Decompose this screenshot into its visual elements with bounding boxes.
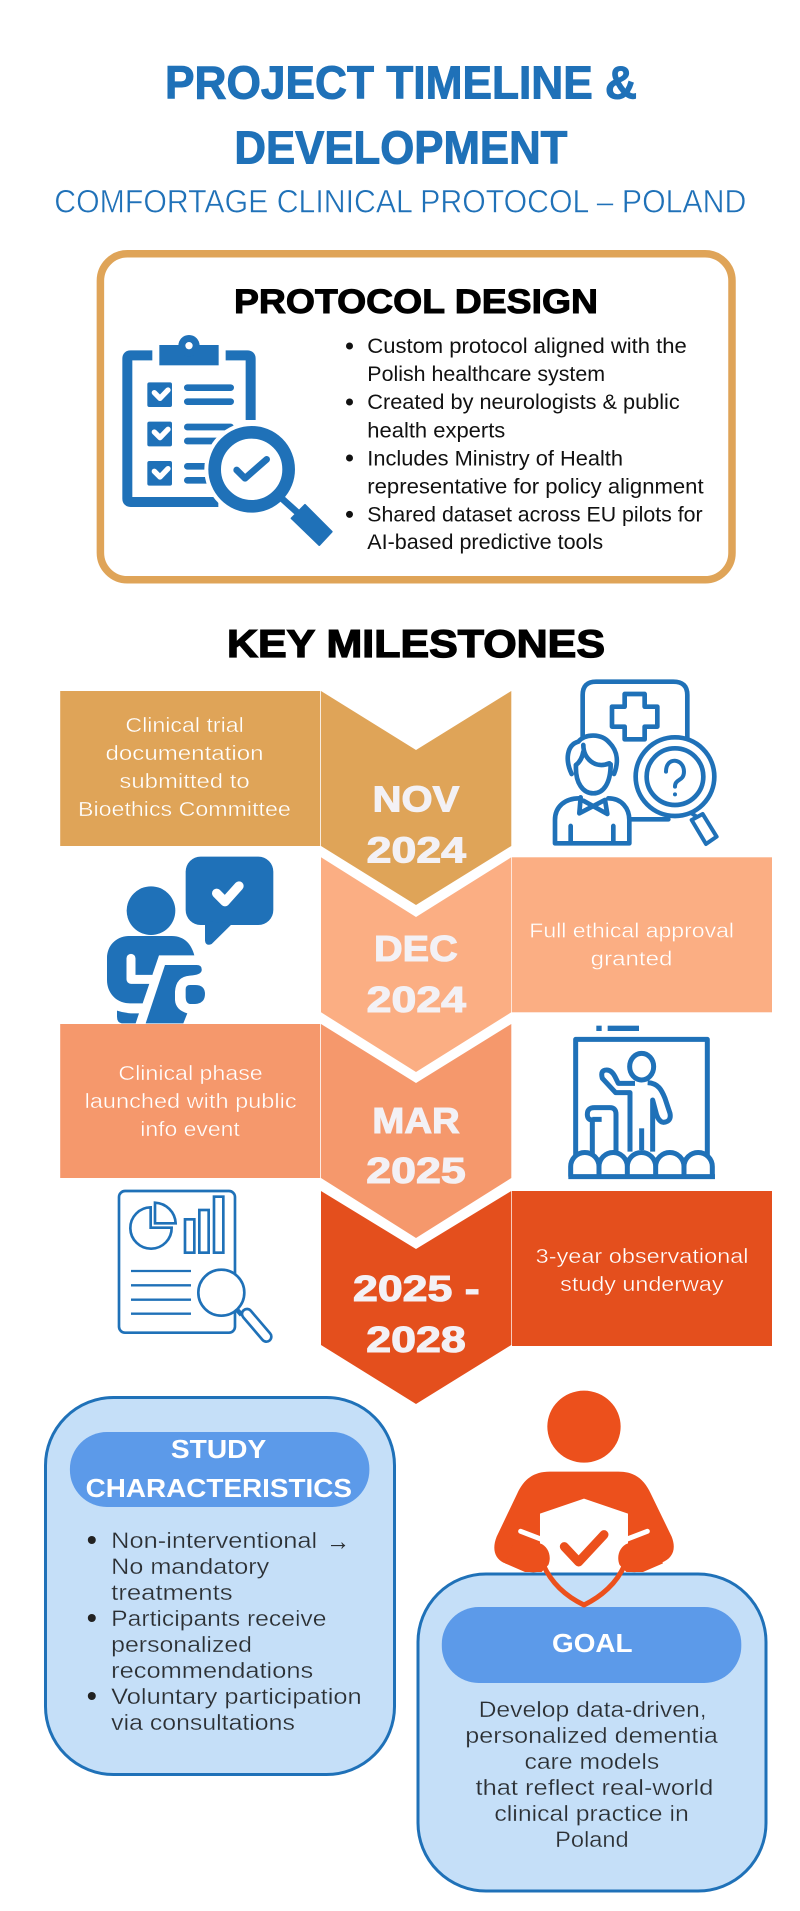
text: protocol design bullets [346,335,704,554]
icon: doctor with cross and magnifier [555,682,717,844]
heading: study characteristics: CHARACTERISTICS [86,1473,352,1503]
heading: goal: GOAL [552,1628,633,1658]
text: study characteristics bullets [88,1526,362,1735]
text: goal description: Develop data-driven, [479,1697,707,1722]
milestone: Mar 2025: 2025 [366,1150,466,1191]
milestone: Nov 2024: documentation [106,743,264,765]
text: study characteristics bullets: Voluntary participation [111,1684,362,1709]
milestone: Mar 2025 [60,1024,511,1238]
text: study characteristics bullets: recommendations [111,1658,313,1683]
milestone: 2025-2028: 3-year observational [536,1246,748,1268]
text: study characteristics bullets: No mandatory [111,1554,270,1579]
milestone: Nov 2024: Clinical trial [125,715,244,737]
milestone: Nov 2024 [60,691,511,905]
text: goal description: Poland [555,1827,629,1852]
icon: clipboard with magnifier [127,335,332,545]
text: protocol design bullets: AI-based predictive tools [367,531,603,554]
milestone: 2025-2028: study underway [560,1274,724,1296]
text: protocol design bullets: Shared dataset across EU pilots for [367,503,703,526]
milestone: Dec 2024: granted [591,948,672,970]
heading: study characteristics [70,1432,369,1507]
milestone: Dec 2024: DEC [374,928,458,969]
text: protocol design bullets: Custom protocol aligned with the [367,335,687,358]
text: study characteristics bullets: Participants receive [111,1606,326,1631]
milestone: Mar 2025: Clinical phase [118,1063,263,1085]
milestone: Mar 2025: MAR [372,1100,460,1141]
milestone: Dec 2024: 2024 [367,979,466,1020]
title [165,56,637,173]
text: goal description: clinical practice in [494,1801,689,1826]
title: DEVELOPMENT [234,121,567,173]
subtitle: COMFORTAGE CLINICAL PROTOCOL – POLAND [54,184,746,220]
panel: protocol design [100,254,732,580]
milestone: Mar 2025: launched with public [85,1091,297,1113]
text: goal description: care models [524,1749,659,1774]
milestone: Nov 2024: Bioethics Committee [78,799,291,821]
text: protocol design bullets: Polish healthcare system [367,363,605,386]
milestone: 2025-2028 [321,1191,772,1404]
text: study characteristics bullets: via consultations [111,1710,295,1735]
text: study characteristics bullets: personalized [111,1632,252,1657]
icon: person holding shield [494,1391,674,1605]
text: protocol design bullets: Includes Ministry of Health [367,448,623,471]
heading: protocol design: PROTOCOL DESIGN [234,283,598,321]
milestone: Nov 2024: NOV [373,778,459,820]
panel: goal [418,1574,766,1891]
heading: study characteristics: STUDY [171,1434,266,1464]
text: protocol design bullets: Created by neurologists & public [367,391,680,414]
heading: goal [442,1607,741,1683]
milestone: Nov 2024: 2024 [367,829,466,870]
icon: person with speech bubble [107,857,273,1023]
text: goal description: that reflect real-world [476,1775,713,1800]
icon: report with charts and magnifier [119,1191,266,1337]
milestone: Mar 2025: info event [140,1119,240,1141]
milestone: Dec 2024: Full ethical approval [529,921,734,943]
text: study characteristics bullets: Non-interventional [111,1528,317,1553]
heading: key milestones: KEY MILESTONES [227,623,605,666]
milestone: Nov 2024: submitted to [119,771,250,793]
panel: study characteristics [46,1398,394,1774]
milestone: 2025-2028: 2028 [366,1319,466,1360]
text: protocol design bullets: representative for policy alignment [367,476,704,498]
milestone: 2025-2028: 2025 - [353,1268,480,1309]
text: study characteristics bullets: → [326,1526,350,1556]
title: PROJECT TIMELINE & [165,56,637,108]
icon: presenter and audience [568,1026,715,1177]
milestone: Dec 2024 [321,857,772,1072]
text: goal description [465,1697,718,1852]
text: protocol design bullets: health experts [367,419,505,442]
text: goal description: personalized dementia [465,1723,718,1748]
text: study characteristics bullets: treatments [111,1580,233,1605]
